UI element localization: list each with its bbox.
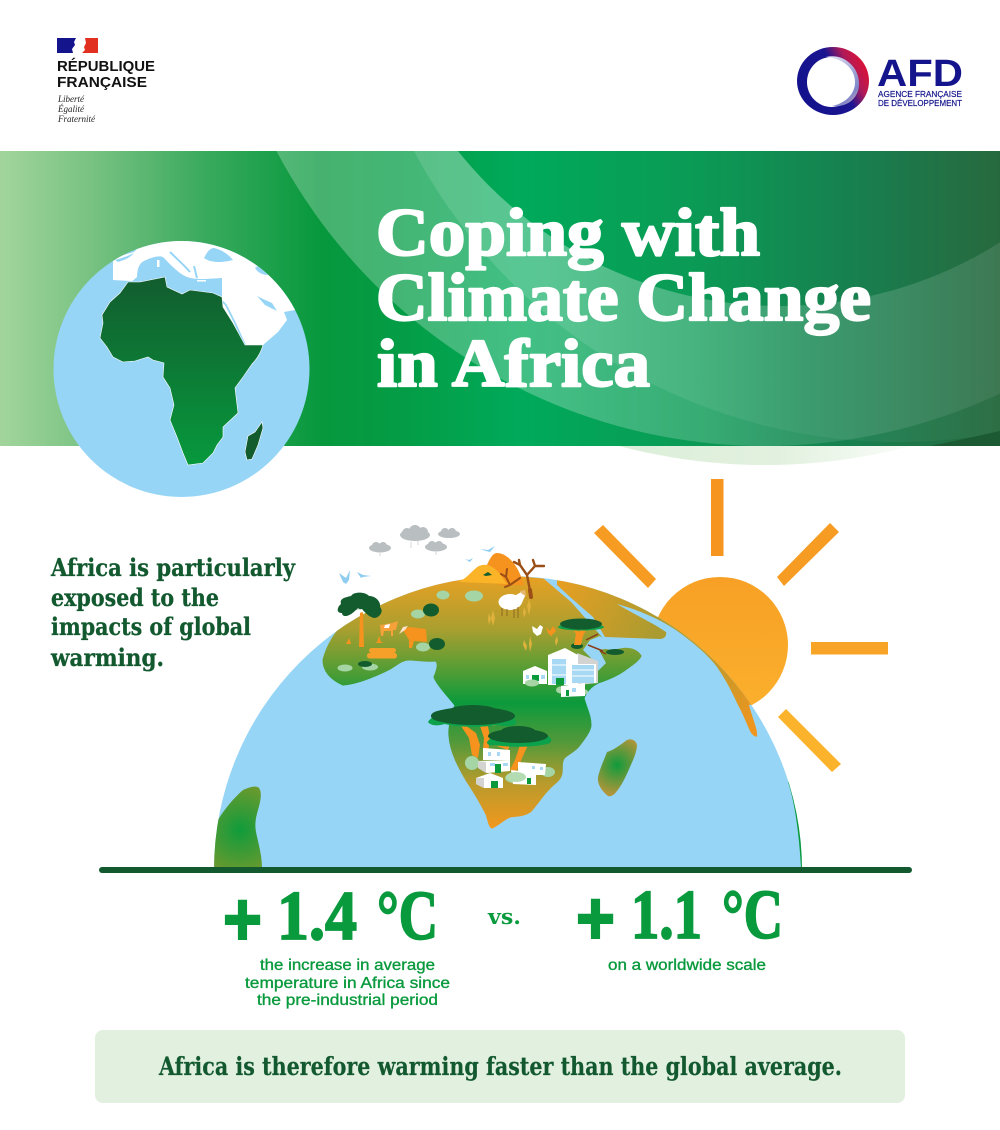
banner [0,151,1000,446]
chickens [532,625,556,636]
sun rays [594,479,888,772]
text: AFD: AFD [877,53,963,95]
stat: world +1.1 °C [576,876,783,974]
text: motto: Égalité [57,104,85,114]
sun [594,479,888,772]
river inlet [583,636,606,671]
acacia by the river [558,618,604,645]
logo: République Française [57,38,155,124]
big number: °C [722,877,783,954]
callout box [95,1030,905,1103]
village houses [465,748,555,788]
big number: + [576,876,615,960]
callout [95,1030,905,1103]
text: Africa is particularly exposed: Africa is particularly [50,553,296,582]
icon: French flag [57,38,98,53]
text: Africa is particularly exposed: warming. [50,643,164,672]
pale arc below banner [620,446,902,465]
text: Africa is particularly exposed: exposed to the [51,583,219,612]
text: République Française: FRANÇAISE [57,74,147,91]
sun disc [652,577,788,713]
globe ocean [214,576,802,870]
right houses [506,762,546,785]
small house [523,666,547,686]
Madagascar [245,422,263,460]
icon: AFD ring [797,47,869,115]
big number: °C [377,878,438,955]
eastern landmass sliver [788,782,802,867]
text: vs.: vs. [487,904,521,929]
crops [488,599,558,652]
large acacias [428,705,551,772]
office building [548,648,598,685]
description: the increase in average [260,957,435,974]
Africa [100,277,263,465]
text: motto: Liberté [57,94,85,104]
banner background [0,151,1000,446]
Europe and Middle East [113,235,300,345]
text: République Française: RÉPUBLIQUE [57,58,155,75]
hills [458,553,524,585]
upper house [478,748,510,773]
Madagascar [598,739,637,796]
clouds [369,525,460,556]
tree with orange trunk [338,593,382,647]
logs [367,648,397,658]
illustrated Africa scene [338,525,624,788]
large globe with illustrated Africa [210,565,806,870]
logo: AFD [797,47,963,115]
bushes near village [465,756,555,783]
text: Agence Française de Développement: AGENCE FRANÇAISE [878,89,962,99]
callout text: Africa is therefore warming faster than the global average. [158,1052,842,1081]
globe ocean [54,241,310,497]
big number: 1.4 [277,878,357,955]
text: Agence Française de Développement: DE DÉVELOPPEMENT [878,98,962,108]
low house [556,683,588,697]
text: Africa is particularly exposed: impacts of global [51,612,251,641]
description: temperature in Africa since [245,975,450,992]
tree stumps [344,636,384,644]
big number: 1.1 [631,877,702,954]
river banks [586,634,606,654]
stat: Africa +1.4 °C [223,877,454,1009]
title: Coping with [376,194,760,270]
dead trees [501,560,544,597]
description: the pre-industrial period [257,992,438,1009]
title: Climate Change [376,259,871,335]
ground line [99,867,912,873]
South America landmass [210,787,262,868]
sheep [498,590,526,618]
bushes [338,590,624,672]
text: motto: Fraternité [57,114,96,124]
lower house [476,773,503,788]
Africa landmass [324,576,640,827]
title: in Africa [377,325,650,401]
small globe showing Africa [54,235,310,497]
birds [339,546,495,584]
description: on a worldwide scale [608,957,766,974]
big number: + [223,877,262,961]
cows [380,621,427,648]
Arabia and Asia landmass [557,580,758,737]
city buildings [523,648,598,697]
